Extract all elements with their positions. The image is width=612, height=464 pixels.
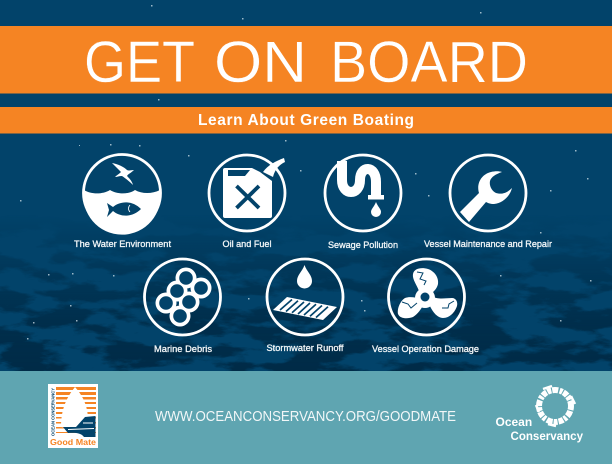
label: Stormwater Runoff xyxy=(266,343,344,353)
sail xyxy=(61,387,88,430)
wrench xyxy=(460,171,512,222)
cracks xyxy=(402,272,454,308)
can handle xyxy=(228,170,250,176)
water drop xyxy=(371,202,381,217)
spout xyxy=(263,158,285,177)
icon: vessel maintenance and repair xyxy=(424,155,552,249)
boat xyxy=(63,416,96,437)
title: BOARD xyxy=(330,30,528,95)
label: Vessel Maintenance and Repair xyxy=(424,239,552,249)
footer band xyxy=(0,371,612,464)
title: GET xyxy=(84,30,195,95)
title banner xyxy=(0,26,612,95)
x mark xyxy=(236,186,259,208)
water drop xyxy=(297,265,312,288)
title xyxy=(84,30,528,95)
logo side text: OCEAN CONSERVANCY xyxy=(50,388,56,436)
water body xyxy=(84,190,160,235)
logo: ocean conservancy: Conservancy xyxy=(510,429,583,443)
url: WWW.OCEANCONSERVANCY.ORG/GOODMATE xyxy=(155,408,456,425)
icon: bird xyxy=(112,163,134,185)
subtitle banner xyxy=(0,107,612,134)
icon: vessel operation damage xyxy=(372,259,479,354)
creature ring xyxy=(536,386,575,426)
pipe xyxy=(342,161,376,196)
propeller hub xyxy=(420,292,430,302)
label: Marine Debris xyxy=(154,344,213,354)
faucet lip xyxy=(368,195,384,200)
title: ON xyxy=(214,30,307,95)
orange stripes xyxy=(56,387,96,433)
icon: marine debris xyxy=(144,259,220,354)
fuel can xyxy=(223,168,272,218)
icon: sewage pollution xyxy=(325,155,401,250)
logo: ocean conservancy xyxy=(496,386,583,443)
label: Oil and Fuel xyxy=(222,239,272,249)
propeller xyxy=(398,268,457,318)
label: Vessel Operation Damage xyxy=(372,344,479,354)
logo wordmark: Ocean xyxy=(496,415,532,429)
logo name: Good Mate xyxy=(50,438,97,447)
icon: oil and fuel xyxy=(209,155,285,249)
icon: the water environment xyxy=(74,154,172,249)
subtitle: Learn About Green Boating xyxy=(198,112,414,129)
logo: good mate xyxy=(48,384,98,448)
icon: stormwater runoff xyxy=(266,259,344,353)
label: Sewage Pollution xyxy=(328,240,398,250)
six-pack rings xyxy=(156,268,212,326)
label: The Water Environment xyxy=(74,239,172,249)
icon: fish xyxy=(107,202,141,217)
storm drain grate xyxy=(273,297,337,320)
fish eye xyxy=(128,205,130,212)
